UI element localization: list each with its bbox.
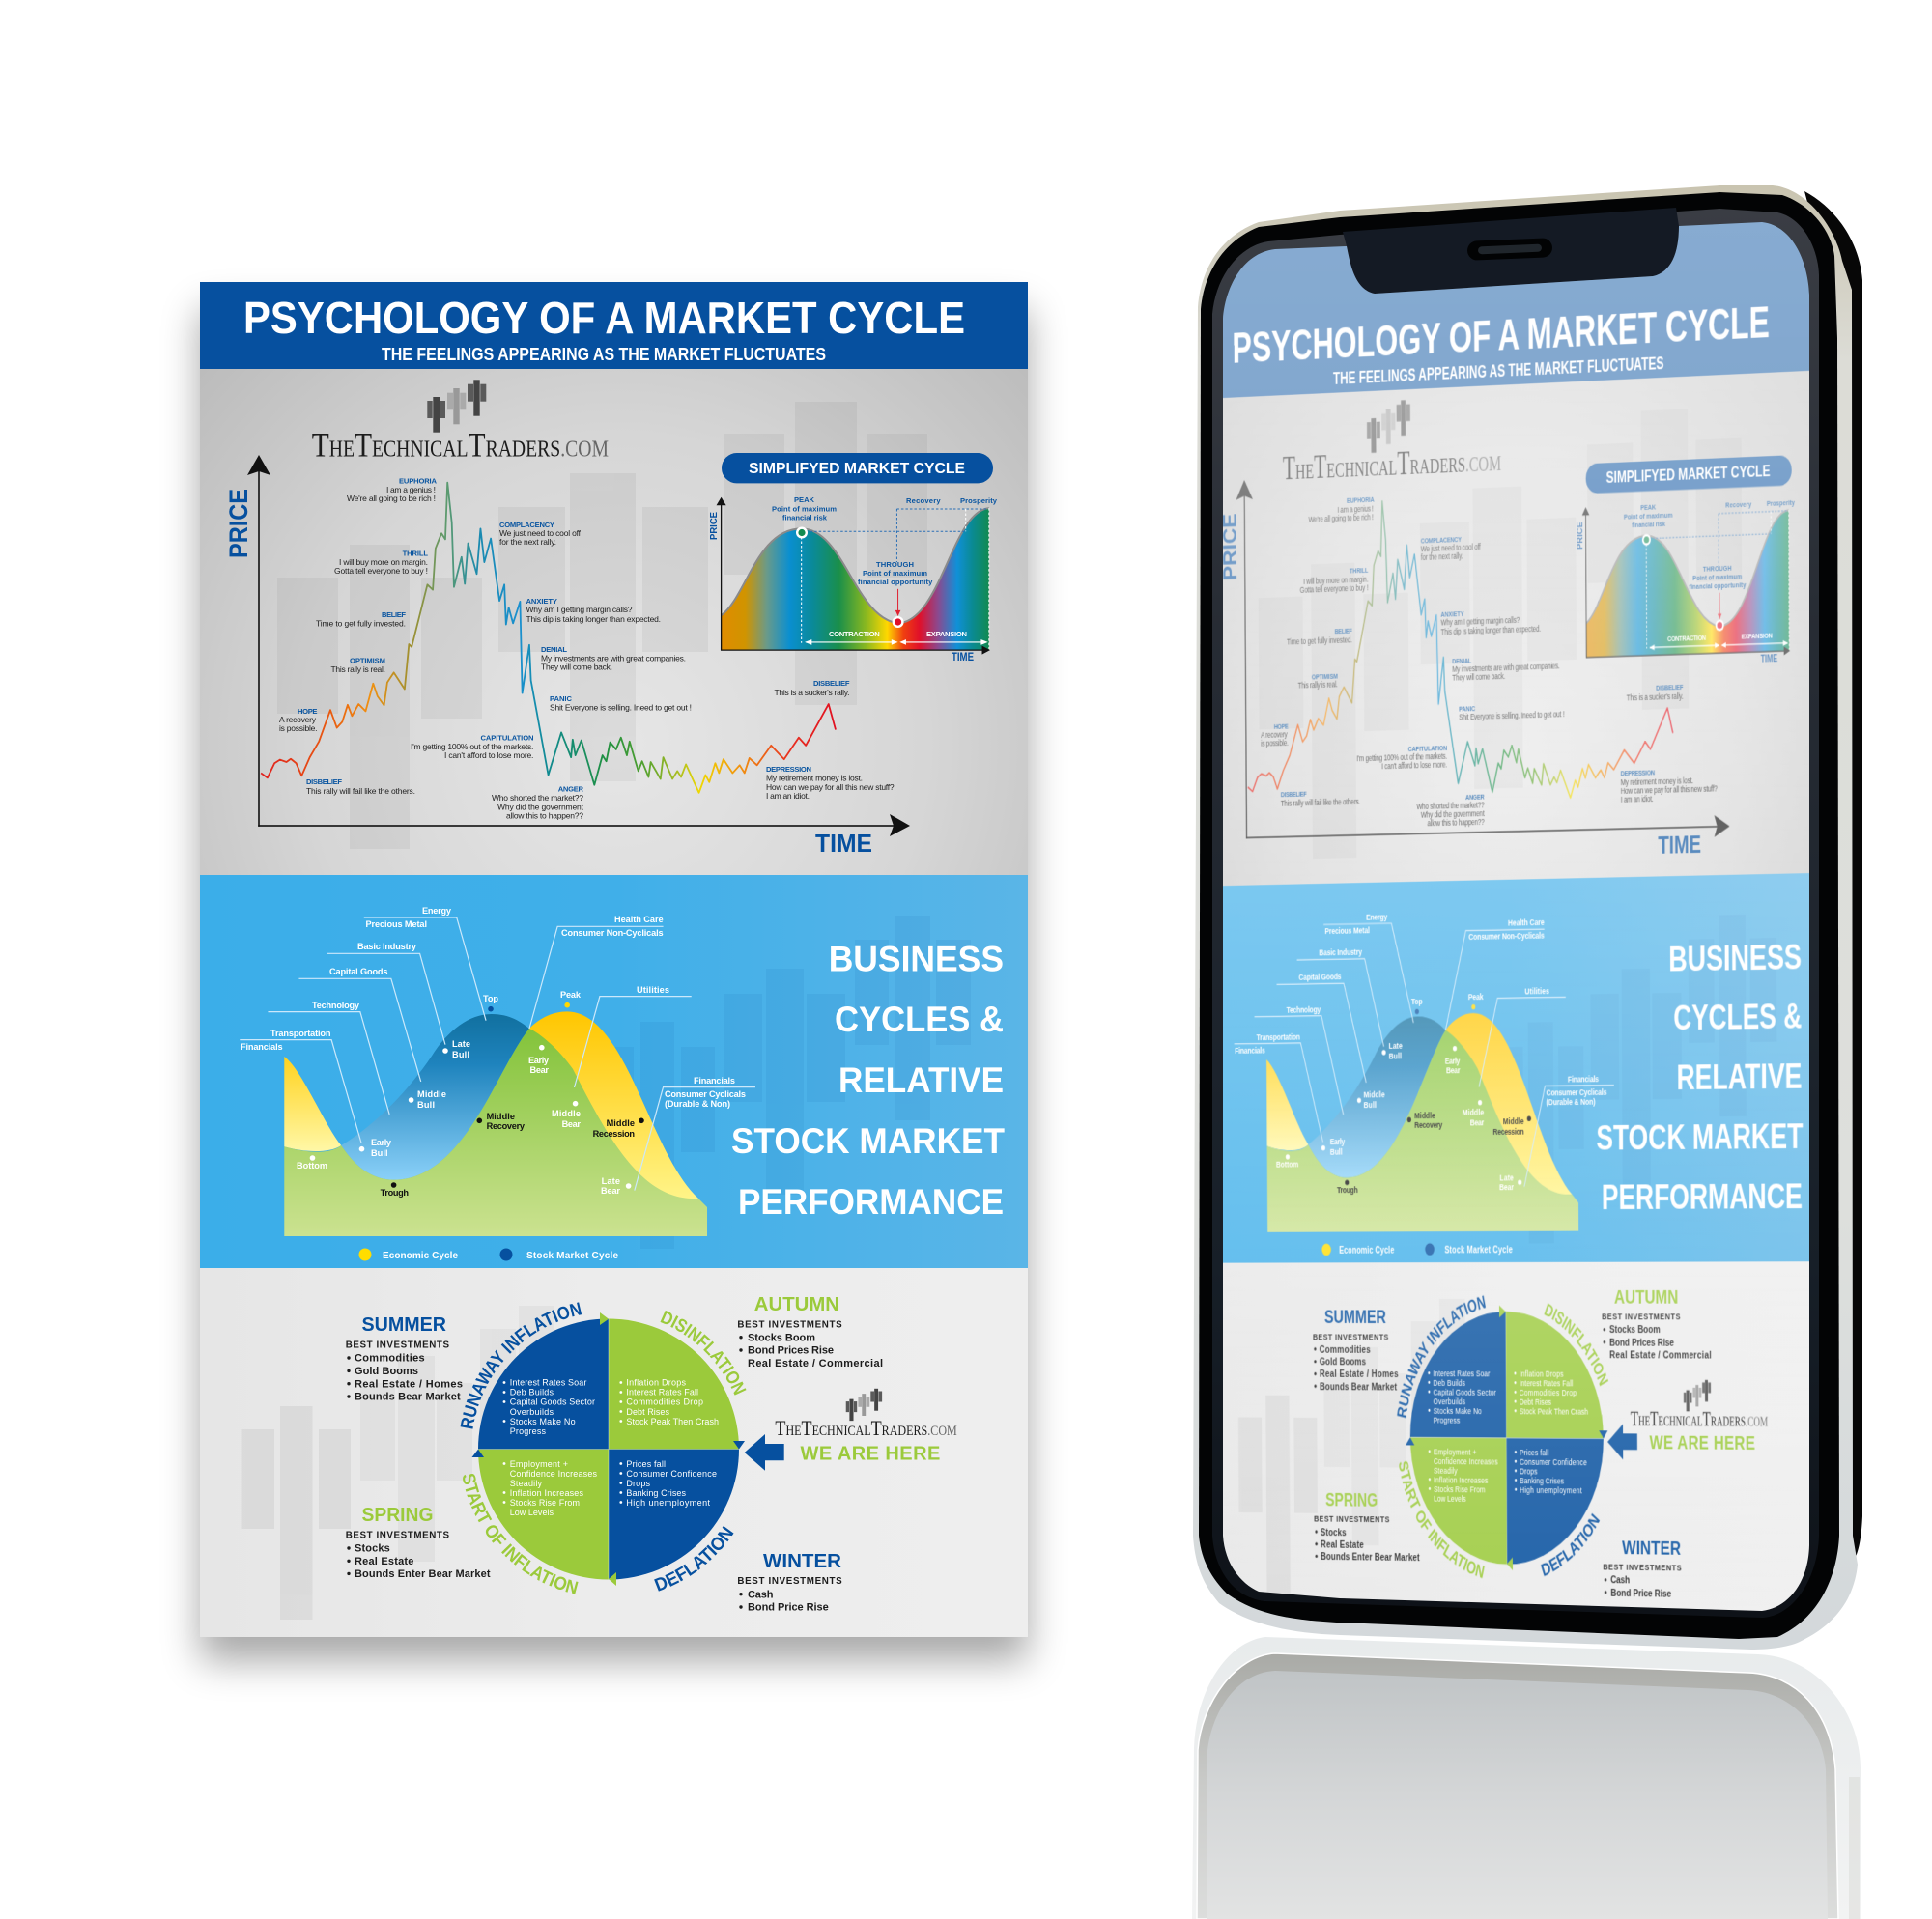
emotion labels along the price line: Who shorted the market?? (492, 793, 583, 803)
sector and stage labels: Transportation (270, 1029, 331, 1038)
season: winter: WINTER (763, 1551, 842, 1572)
season: summer: Commodities (355, 1353, 425, 1365)
wheel quadrant text: Stock Peak Then Crash (626, 1417, 719, 1426)
wheel quadrant text: Interest Rates Soar (510, 1378, 586, 1388)
sector and stage labels: Energy (422, 906, 452, 916)
ghost candlesticks (242, 1406, 351, 1620)
market cycle price line (261, 483, 836, 793)
chart legend: Economic Cycle (383, 1251, 458, 1261)
ghost candlesticks (600, 916, 971, 1249)
wheel quadrant text: Prices fall (626, 1459, 666, 1469)
season: summer (346, 1314, 463, 1403)
poster drop shadow (200, 309, 1028, 1661)
sector and stage labels: Peak (560, 990, 582, 1000)
sector and stage labels: Top (483, 994, 498, 1003)
season: winter: Bond Price Rise (748, 1602, 829, 1614)
simplified market cycle chart: Recovery (906, 496, 941, 505)
curved label: disinflation: DISINFLATION (661, 1310, 746, 1396)
wheel quadrant text: Inflation Increases (510, 1488, 583, 1498)
simplified market cycle chart: PRICE (708, 512, 720, 540)
simplified market cycle chart: Point of maximum (863, 569, 927, 578)
sector and stage labels: Health Care (614, 915, 664, 924)
sector and stage labels: Early (371, 1138, 392, 1147)
emotion labels along the price line: How can we pay for all this new stuff? (766, 782, 895, 792)
emotion labels along the price line: Gotta tell everyone to buy ! (334, 566, 428, 576)
sector and stage labels: Bear (529, 1065, 549, 1075)
season: autumn: BEST INVESTMENTS (737, 1319, 842, 1330)
emotion labels along the price line: We're all going to be rich ! (347, 494, 436, 503)
wheel quadrant text: Banking Crises (626, 1488, 686, 1498)
sector and stage labels: Consumer Non-Cyclicals (561, 928, 664, 938)
season: spring: SPRING (361, 1505, 433, 1526)
emotion labels along the price line: COMPLACENCY (499, 521, 554, 529)
chart legend: Stock Market Cycle (526, 1251, 618, 1261)
season: summer: SUMMER (361, 1314, 447, 1336)
wheel quadrant text: Confidence Increases (510, 1469, 597, 1479)
emotion labels along the price line: I will buy more on margin. (339, 557, 428, 567)
emotion labels along the price line: DENIAL (541, 645, 567, 654)
phone notch (1343, 208, 1679, 294)
curved label: deflation: DEFLATION (654, 1526, 734, 1592)
sector and stage labels: Middle (607, 1118, 635, 1128)
phone inner bezel band (1212, 209, 1819, 1618)
emotion labels along the price line: My retirement money is lost. (766, 774, 863, 783)
phone reflection on the floor (1192, 1637, 1861, 1919)
wheel quadrants (471, 1312, 745, 1586)
emotion labels along the price line: PANIC (550, 694, 573, 703)
axis label: price: PRICE (224, 489, 253, 558)
sector and stage labels: Late (602, 1176, 620, 1186)
poster reuse (1201, 284, 1823, 1624)
season: spring: Stocks (355, 1543, 390, 1555)
wheel quadrant text: Employment + (510, 1459, 568, 1469)
emotion labels along the price line: CAPITULATION (481, 734, 533, 743)
logo: the technical traders, small: THETECHNICALTRADERS.COM (775, 1416, 957, 1440)
emotion labels along the price line: THRILL (403, 549, 428, 558)
heading: business cycles and relative stock market performance: PERFORMANCE (738, 1182, 1004, 1222)
simplified market cycle chart: financial risk (782, 513, 828, 522)
poster copy on screen (1223, 222, 1809, 1611)
wheel quadrant text: Interest Rates Fall (626, 1388, 698, 1397)
heading: business cycles and relative stock market performance (731, 940, 1005, 1222)
sector and stage labels: Bear (562, 1119, 581, 1129)
simplified market cycle chart: CONTRACTION (829, 630, 880, 638)
emotion labels along the price line: Time to get fully invested. (316, 619, 406, 629)
emotion labels along the price line: HOPE (298, 707, 317, 716)
season: spring: BEST INVESTMENTS (346, 1530, 449, 1540)
sector and stage labels: Capital Goods (329, 967, 388, 976)
simplified market cycle pill: SIMPLIFYED MARKET CYCLE (749, 461, 965, 477)
sector and stage labels: Bull (417, 1100, 435, 1110)
screen glare wash (1223, 222, 1809, 1597)
emotion labels along the price line: A recovery (279, 715, 317, 724)
emotion labels along the price line: They will come back. (541, 663, 612, 672)
phone black bezel (1199, 192, 1839, 1639)
ghost candlesticks behind the market chart (277, 402, 927, 849)
season: summer: BEST INVESTMENTS (346, 1340, 449, 1351)
wheel quadrant text: Progress (510, 1426, 547, 1436)
wheel quadrant text: Stocks Rise From (510, 1498, 580, 1508)
wheel quadrant text: Drops (626, 1479, 651, 1488)
emotion labels along the price line: DEPRESSION (766, 765, 811, 774)
simplified market cycle chart: EXPANSION (926, 630, 967, 638)
sector and stage labels: Utilities (637, 985, 669, 995)
emotion labels along the price line: This rally is real. (330, 664, 385, 674)
emotion labels along the price line: for the next rally. (499, 537, 556, 547)
emotion labels along the price line: is possible. (279, 723, 317, 733)
season: spring: Real Estate (355, 1556, 413, 1567)
season: summer: Bounds Bear Market (355, 1392, 461, 1403)
heading: business cycles and relative stock market performance: BUSINESS (829, 940, 1004, 979)
emotion labels along the price line: My investments are with great companies. (541, 653, 686, 663)
emotion labels along the price line: DISBELIEF (306, 777, 342, 786)
simplified market cycle chart (708, 495, 998, 663)
chart legend (359, 1248, 618, 1261)
heading: business cycles and relative stock market performance: RELATIVE (838, 1060, 1004, 1100)
arrow: we are here (745, 1434, 784, 1471)
emotion labels along the price line: This rally will fail like the others. (306, 786, 415, 796)
panel: seasonal investment wheel (200, 1268, 1028, 1637)
sector and stage labels: Recovery (487, 1121, 526, 1131)
wheel quadrant text: Stocks Make No (510, 1417, 576, 1426)
season: summer: Real Estate / Homes (355, 1378, 463, 1390)
logo: the technical traders, small (775, 1389, 957, 1440)
season: winter (737, 1551, 842, 1614)
wheel quadrant text: Capital Goods Sector (510, 1397, 595, 1407)
wheel quadrant text: Low Levels (510, 1508, 554, 1517)
sector and stage labels: Recession (593, 1129, 635, 1139)
heading: business cycles and relative stock market performance: CYCLES & (835, 1000, 1004, 1039)
wheel quadrant text: Steadily (510, 1479, 543, 1488)
sector and stage labels: Consumer Cyclicals (665, 1089, 746, 1099)
emotion labels along the price line: OPTIMISM (350, 657, 385, 665)
poster: psychology of a market cycle (200, 282, 1028, 1637)
wheel quadrant text: Deb Builds (510, 1388, 554, 1397)
phone screen showing the poster in perspective (1223, 222, 1809, 1611)
emotion labels along the price line: This dip is taking longer than expected. (526, 614, 661, 624)
emotion labels along the price line: ANGER (558, 785, 584, 794)
wheel quadrant text: Overbuilds (510, 1407, 554, 1417)
cycle stage dots (310, 1002, 644, 1189)
cycle area chart (240, 917, 755, 1236)
logo: the technical traders: THETECHNICALTRADERS.COM (312, 425, 609, 464)
heading: business cycles and relative stock market performance: STOCK MARKET (731, 1121, 1005, 1161)
emotion labels along the price line: Why am I getting margin calls? (526, 605, 633, 614)
wheel quadrant text: High unemployment (626, 1498, 710, 1508)
sector and stage labels: Middle (487, 1112, 515, 1121)
season: autumn: Stocks Boom (748, 1332, 815, 1343)
phone metal rim (1193, 185, 1858, 1650)
simplified market cycle pill (722, 453, 993, 483)
emotion labels along the price line (279, 476, 895, 820)
emotion labels along the price line: I am an idiot. (766, 791, 810, 801)
sector and stage labels: Middle (552, 1109, 581, 1118)
wheel quadrant text (503, 1378, 719, 1517)
sector and stage labels: Basic Industry (357, 942, 417, 951)
panel: market cycle background (200, 369, 1028, 875)
wheel quadrant text: Inflation Drops (626, 1378, 686, 1388)
axis label: time: TIME (815, 829, 872, 858)
simplified market cycle chart: TIME (952, 652, 974, 663)
season: spring (346, 1505, 491, 1580)
sector and stage labels: Trough (381, 1188, 409, 1198)
phone speaker (1467, 238, 1552, 261)
emotion labels along the price line: I am a genius ! (386, 485, 436, 494)
season: winter: Cash (748, 1589, 774, 1600)
title: PSYCHOLOGY OF A MARKET CYCLE (243, 293, 965, 343)
sector and stage labels: Financials (694, 1076, 735, 1086)
emotion labels along the price line: EUPHORIA (399, 476, 438, 485)
sector and stage labels (241, 906, 746, 1198)
emotion labels along the price line: ANXIETY (526, 597, 557, 606)
sector leader lines (240, 917, 755, 1191)
sector and stage labels: (Durable & Non) (665, 1099, 730, 1109)
emotion labels along the price line: I can't afford to lose more. (444, 750, 533, 760)
season: winter: BEST INVESTMENTS (737, 1576, 842, 1587)
season: spring: Bounds Enter Bear Market (355, 1568, 491, 1580)
simplified market cycle chart: THROUGH (876, 560, 914, 569)
blue header continuing above the poster top (1223, 222, 1808, 315)
wheel quadrant text: Debt Rises (626, 1407, 670, 1417)
season: autumn: Real Estate / Commercial (748, 1358, 883, 1369)
emotion labels along the price line: We just need to cool off (499, 528, 582, 538)
wheel quadrant text: Commodities Drop (626, 1397, 703, 1407)
phone back edge (1804, 191, 1862, 1557)
simplified market cycle chart: Prosperity (960, 496, 998, 505)
emotion labels along the price line: DISBELIEF (813, 679, 850, 688)
sector and stage labels: Bull (452, 1050, 469, 1059)
emotion labels along the price line: Shit Everyone is selling. Ineed to get out ! (550, 703, 692, 713)
simplified market cycle chart: financial opportunity (858, 578, 933, 586)
emotion labels along the price line: Why did the government (497, 802, 584, 811)
season: summer: Gold Booms (355, 1366, 418, 1377)
sector and stage labels: Bull (371, 1148, 388, 1158)
season: autumn: Bond Prices Rise (748, 1345, 834, 1357)
subtitle: THE FEELINGS APPEARING AS THE MARKET FLUCTUATES (382, 344, 826, 364)
season: autumn: AUTUMN (754, 1294, 839, 1315)
panel: business cycles (200, 875, 1028, 1268)
callout: we are here: WE ARE HERE (800, 1443, 940, 1464)
sector and stage labels: Financials (241, 1042, 283, 1052)
sector and stage labels: Bear (601, 1186, 620, 1196)
wheel quadrant text: Consumer Confidence (626, 1469, 717, 1479)
emotion labels along the price line: BELIEF (382, 610, 406, 619)
curved label: start of inflation: START OF INFLATION (463, 1474, 578, 1594)
sector and stage labels: Middle (417, 1089, 446, 1099)
header band (200, 282, 1028, 369)
sector and stage labels: Bottom (297, 1161, 327, 1171)
chart axes with arrows (247, 455, 910, 836)
sector and stage labels: Late (452, 1039, 470, 1049)
emotion labels along the price line: allow this to happen?? (506, 810, 583, 820)
simplified market cycle chart: PEAK (794, 495, 815, 504)
emotion labels along the price line: I'm getting 100% out of the markets. (411, 742, 533, 751)
sector and stage labels: Precious Metal (365, 919, 427, 929)
season: autumn (737, 1294, 883, 1369)
sector and stage labels: Early (528, 1056, 550, 1065)
simplified market cycle chart: Point of maximum (772, 504, 837, 513)
curved label: runaway inflation: RUNAWAY INFLATION (460, 1302, 582, 1429)
logo: the technical traders (312, 380, 609, 464)
emotion labels along the price line: This is a sucker's rally. (775, 688, 850, 697)
sector and stage labels: Technology (312, 1001, 360, 1010)
